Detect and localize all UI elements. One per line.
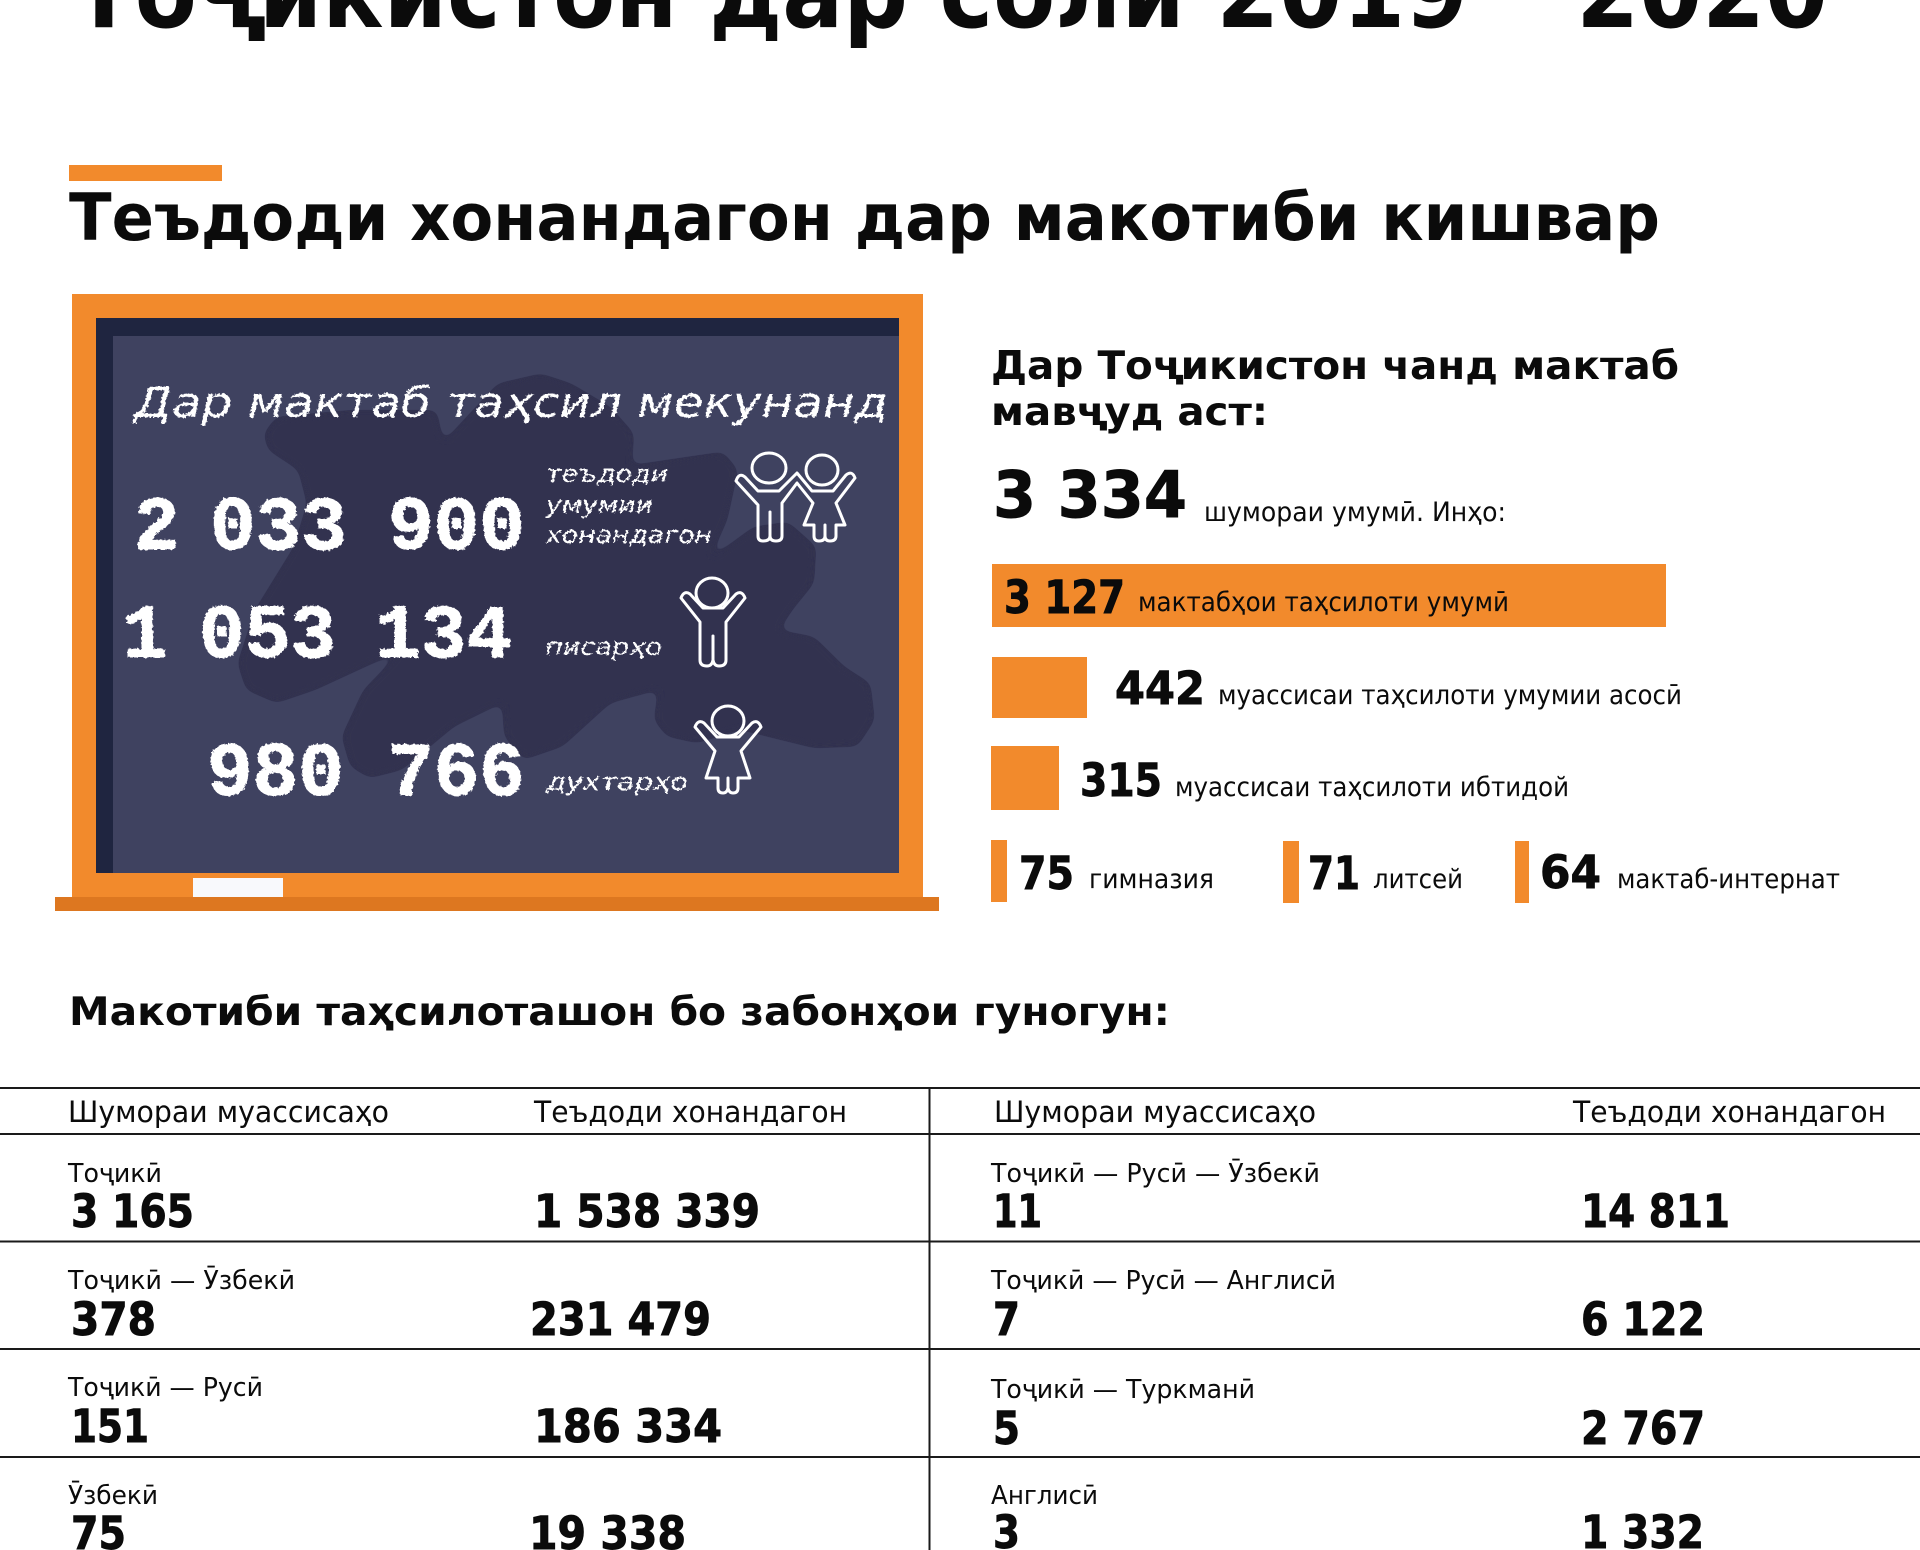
row: Tajik-Turkmen: 5 xyxy=(993,1402,1020,1455)
row: Tajik-Uzbek: Тоҷикӣ — Ӯзбекӣ xyxy=(67,1265,295,1296)
bar: boarding school: мактаб-интернат xyxy=(1617,864,1840,895)
total pupils label: хонандагон xyxy=(545,521,712,549)
row: Tajik-Russian-Uzbek: 14 811 xyxy=(1581,1185,1730,1238)
bar: boarding school xyxy=(1515,841,1840,903)
row: Uzbek: Ӯзбекӣ xyxy=(68,1480,158,1511)
girls label: духтарҳо xyxy=(545,768,688,796)
eraser smear xyxy=(237,373,875,778)
row: Tajik-Uzbek: 378 xyxy=(71,1293,156,1346)
schools heading: мавҷуд аст: xyxy=(991,390,1268,435)
row: Tajik-Russian-Uzbek: 11 xyxy=(993,1185,1042,1238)
board ledge xyxy=(55,897,939,911)
bar: basic general education xyxy=(992,657,1682,718)
icon: girl xyxy=(695,706,761,793)
bar: gymnasium: 75 xyxy=(1019,847,1074,900)
bar: lyceum: 71 xyxy=(1308,847,1360,900)
section heading: Теъдоди хонандагон дар макотиби кишвар xyxy=(69,181,1660,256)
icon: boy and girl xyxy=(736,453,855,541)
schools heading xyxy=(991,344,1679,435)
board frame xyxy=(72,294,923,897)
table heading: Макотиби таҳсилоташон бо забонҳои гуногун: xyxy=(69,990,1170,1035)
total schools: 3 334 xyxy=(993,459,1187,533)
bar: basic general education: муассисаи таҳсилоти умумии асосӣ xyxy=(1218,680,1682,711)
total schools label: шумораи умумӣ. Инҳо: xyxy=(1204,497,1506,528)
chalk text and numbers xyxy=(122,378,888,818)
table header: Шумораи муассисаҳо xyxy=(994,1095,1316,1129)
total pupils number: 2 xyxy=(134,486,180,572)
row: Tajik-Russian-English xyxy=(990,1266,1705,1346)
bar: general education schools: мактабҳои таҳсилоти умумӣ xyxy=(1138,587,1509,618)
bar: basic general education: 442 xyxy=(1115,662,1205,715)
boys number: 1 xyxy=(122,594,168,680)
bar: general education schools: 3 127 xyxy=(1004,571,1125,624)
panel: number of schools xyxy=(991,344,1840,903)
row: Tajik-Turkmen: Тоҷикӣ — Туркманӣ xyxy=(990,1375,1255,1405)
orange accent bar xyxy=(69,165,222,181)
row: English xyxy=(991,1481,1704,1550)
boys label: писарҳо xyxy=(545,633,662,661)
total pupils label: теъдоди xyxy=(546,460,668,488)
row: Tajik-Turkmen xyxy=(990,1375,1705,1455)
row: Tajik: Тоҷикӣ xyxy=(67,1159,162,1189)
row: Tajik: 1 538 339 xyxy=(534,1185,760,1238)
boys number: 053 xyxy=(199,594,336,680)
chalk heading: Дар мактаб таҳсил мекунанд xyxy=(132,378,888,427)
bar: primary education: 315 xyxy=(1080,754,1162,807)
total pupils label xyxy=(545,460,712,549)
panel: chalkboard xyxy=(55,294,939,911)
total pupils label: умумии xyxy=(545,491,653,519)
bar: gymnasium: гимназия xyxy=(1089,864,1214,895)
bar: lyceum xyxy=(1283,841,1463,903)
chalk piece xyxy=(193,878,283,897)
row: Tajik-Uzbek xyxy=(67,1265,711,1346)
schools heading: Дар Тоҷикистон чанд мактаб xyxy=(991,344,1679,389)
row: Tajik-Russian xyxy=(67,1373,722,1453)
bar: primary education: муассисаи таҳсилоти ибтидой xyxy=(1175,772,1569,803)
bar: lyceum: литсей xyxy=(1373,864,1463,895)
icon: boy xyxy=(681,578,745,666)
row: Tajik-Russian: 186 334 xyxy=(534,1400,722,1453)
row: Uzbek xyxy=(68,1480,686,1550)
bar: primary education xyxy=(991,746,1569,810)
row: Tajik xyxy=(67,1159,760,1238)
row: Tajik-Turkmen: 2 767 xyxy=(1581,1402,1705,1455)
bar: gymnasium xyxy=(991,840,1214,902)
bar: general education schools xyxy=(992,564,1666,627)
total pupils number: 033 xyxy=(210,486,347,572)
girls number: 766 xyxy=(388,732,525,818)
girls number: 980 xyxy=(207,732,344,818)
table header: Теъдоди хонандагон xyxy=(533,1095,847,1129)
table xyxy=(0,1088,1920,1550)
board surface xyxy=(113,336,899,873)
boys number: 134 xyxy=(375,594,512,680)
row: Tajik-Russian-Uzbek: Тоҷикӣ — Русӣ — Ӯзбекӣ xyxy=(990,1158,1320,1189)
row: Tajik-Russian-English: 6 122 xyxy=(1581,1293,1705,1346)
board shadow edge xyxy=(96,318,899,873)
row: Tajik-Russian: 151 xyxy=(71,1400,149,1453)
total pupils number: 900 xyxy=(388,486,525,572)
row: Tajik-Russian: Тоҷикӣ — Русӣ xyxy=(67,1373,263,1403)
table header: Теъдоди хонандагон xyxy=(1572,1095,1886,1129)
bar: boarding school: 64 xyxy=(1540,846,1601,899)
row: Tajik-Russian-English: Тоҷикӣ — Русӣ — Англисӣ xyxy=(990,1266,1336,1296)
row: English: Англисӣ xyxy=(991,1481,1098,1511)
table header: Шумораи муассисаҳо xyxy=(68,1095,389,1129)
table header xyxy=(68,1095,1886,1129)
row: Tajik: 3 165 xyxy=(71,1185,194,1238)
row: Tajik-Russian-English: 7 xyxy=(993,1293,1020,1346)
row: Tajik-Uzbek: 231 479 xyxy=(530,1293,711,1346)
row: Tajik-Russian-Uzbek xyxy=(990,1158,1730,1238)
